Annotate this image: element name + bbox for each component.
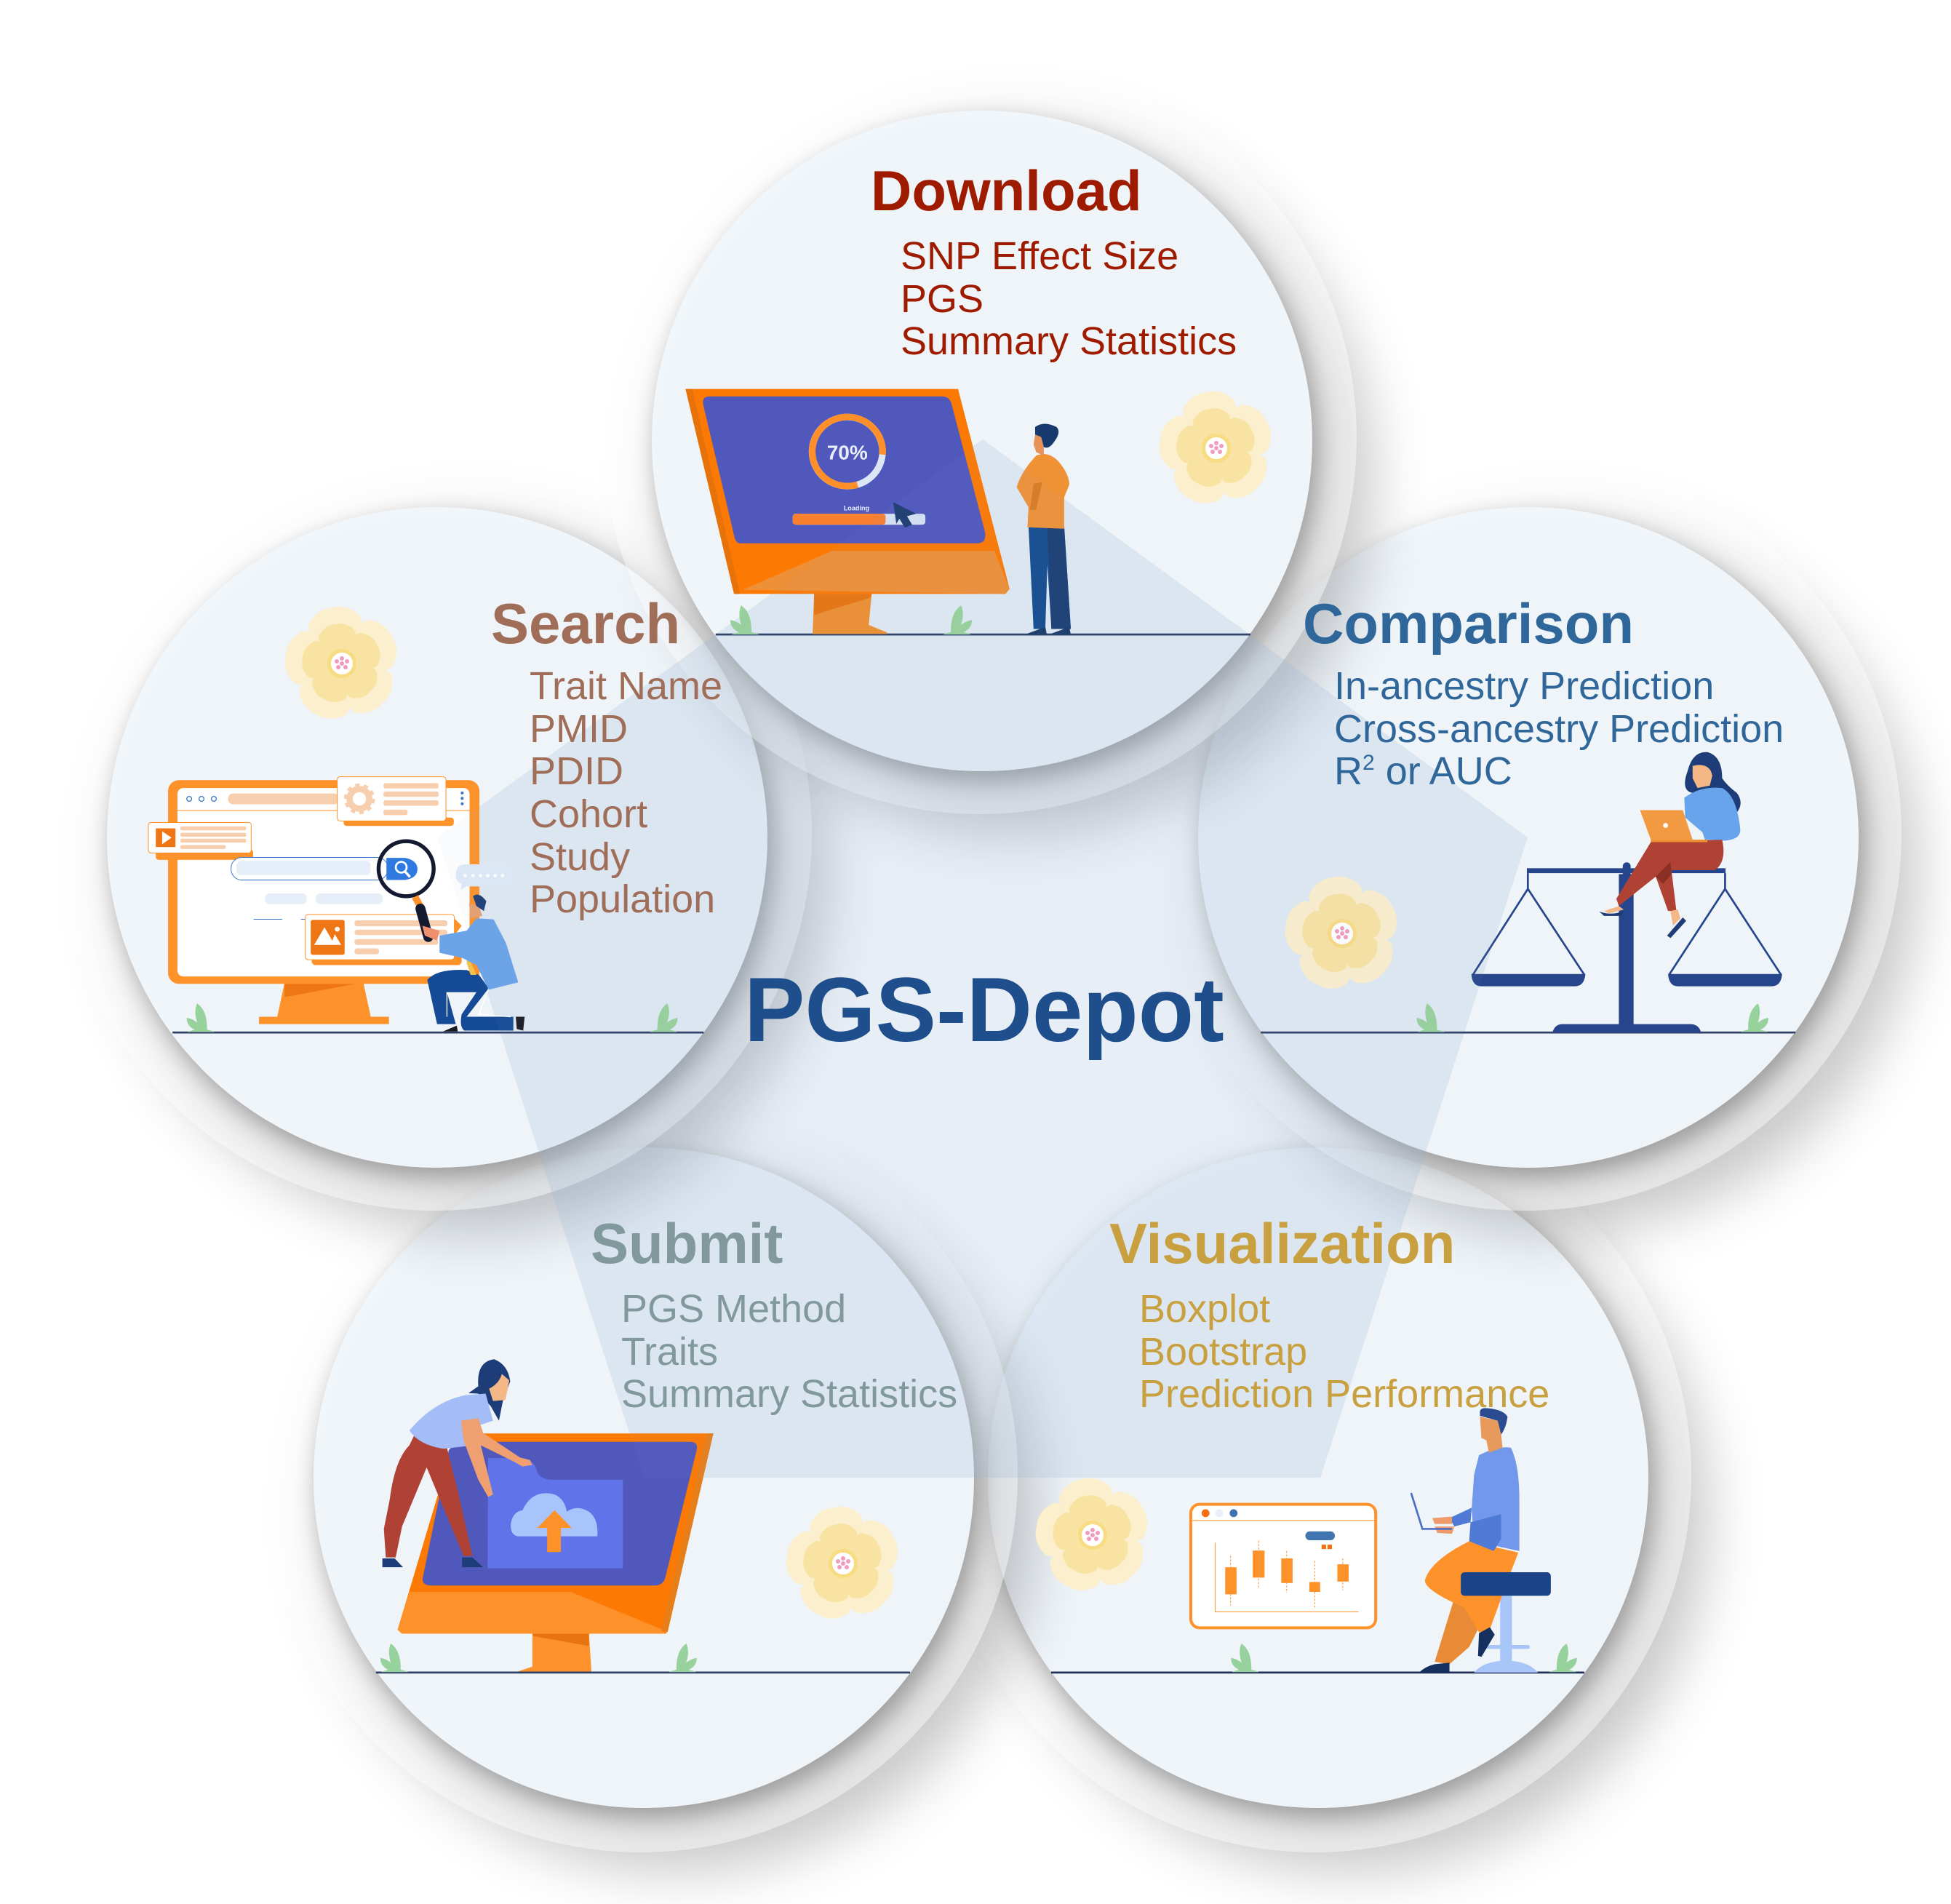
list: Visualization items: Bootstrap [1139, 1330, 1307, 1374]
speech bubble [456, 864, 513, 890]
list: Submit items: PGS Method [621, 1287, 846, 1331]
list: Download items [901, 234, 1237, 363]
plants [380, 1644, 697, 1672]
list: Submit items [621, 1287, 957, 1416]
illustration: Comparison scales and woman [1261, 752, 1795, 1034]
woman [383, 1359, 532, 1567]
list: Visualization items: Boxplot [1139, 1287, 1270, 1331]
woman with laptop [1599, 752, 1741, 938]
circle: Visualization [938, 1099, 1707, 1871]
plants [1416, 1003, 1768, 1032]
flowers [271, 381, 1414, 1635]
ground line [172, 1032, 703, 1034]
list: Search items: Population [530, 877, 715, 921]
list: Visualization items: Prediction Performance [1139, 1372, 1549, 1416]
browser monitor [148, 777, 479, 1024]
list: Comparison items: R [1334, 749, 1362, 793]
magnifying glass [378, 841, 434, 937]
illustration: Visualization chart and man [1051, 1408, 1584, 1673]
list: Search items: Cohort [530, 792, 647, 836]
ground line [1261, 1032, 1795, 1034]
heading: Download: Download [871, 159, 1142, 223]
text: Search [491, 591, 722, 921]
heading: Visualization: Visualization [1109, 1211, 1455, 1275]
flower: Search [271, 597, 414, 735]
ground line [376, 1672, 910, 1673]
list: Search items: PDID [530, 749, 623, 793]
flower: Download [1145, 381, 1288, 519]
list: Visualization items [1139, 1287, 1549, 1416]
circle: Search [58, 457, 826, 1230]
list: Search items [530, 664, 722, 921]
man [1017, 423, 1071, 634]
plants [187, 1003, 678, 1032]
ground line [1051, 1672, 1584, 1673]
plants [1231, 1644, 1577, 1672]
monitor [398, 1433, 714, 1672]
circle: Comparison [1148, 457, 1918, 1230]
heading: Submit: Submit [591, 1211, 783, 1275]
central pentagon connecting circle centres [437, 439, 1528, 1478]
candlestick chart [1191, 1505, 1376, 1628]
flower: Submit [772, 1497, 915, 1635]
list: Comparison items [1334, 664, 1784, 793]
flower: Visualization [1021, 1468, 1165, 1606]
stool [1474, 1596, 1538, 1673]
list: Submit items: Summary Statistics [621, 1372, 957, 1416]
pentagon tint over illustrations [437, 439, 1528, 1478]
list: Comparison items: 2 [1362, 751, 1375, 775]
man with laptop [1411, 1408, 1551, 1673]
text: Comparison [1303, 591, 1784, 793]
monitor: Loading [844, 504, 869, 511]
heading: Search: Search [491, 591, 680, 656]
list: Submit items: Traits [621, 1330, 718, 1374]
text: Visualization [1109, 1211, 1549, 1416]
list: Comparison items: or AUC [1375, 749, 1512, 793]
list: Search items: Trait Name [530, 664, 722, 708]
list: Download items: SNP Effect Size [901, 234, 1178, 278]
heading: Comparison: Comparison [1303, 591, 1634, 656]
title: PGS-Depot: PGS-Depot [744, 960, 1224, 1061]
monitor: 70% [827, 442, 868, 464]
illustration: Submit monitor and woman [376, 1359, 910, 1673]
list: Search items: Study [530, 835, 630, 879]
list: Comparison items: In-ancestry Prediction [1334, 664, 1714, 708]
list: Download items: PGS [901, 277, 984, 321]
list: Download items: Summary Statistics [901, 319, 1237, 363]
monitor [685, 389, 1010, 634]
circle: Download [603, 60, 1371, 834]
illustration: Download monitor and man [685, 389, 1250, 635]
list: Search items: PMID [530, 707, 628, 751]
ground line [716, 634, 1250, 635]
illustration: Search monitor and man [148, 777, 703, 1034]
circle: Submit [264, 1099, 1033, 1871]
flower: Comparison [1271, 867, 1414, 1005]
kneeling man [423, 895, 524, 1032]
plants [730, 605, 972, 634]
list: Comparison items: Cross-ancestry Prediction [1334, 707, 1784, 751]
text: Download [871, 159, 1237, 363]
text: Submit [591, 1211, 957, 1416]
balance scale [1472, 862, 1782, 1032]
